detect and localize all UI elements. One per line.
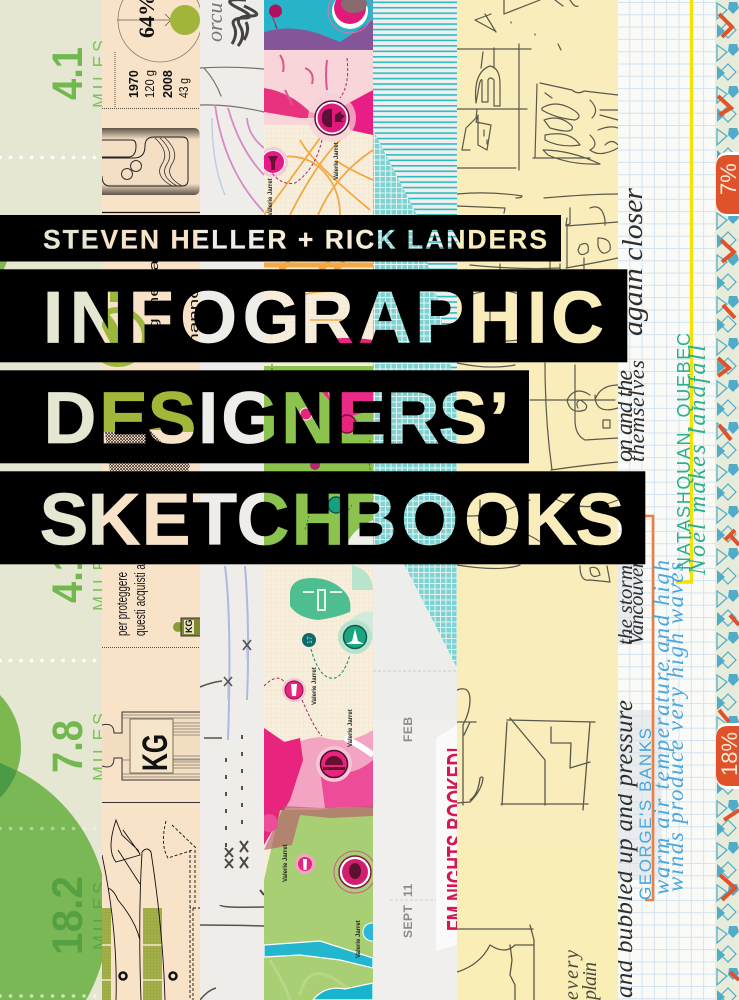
icon: large KG weight [102, 712, 201, 780]
small rotated text behind title [151, 262, 198, 342]
stat: 7.8 miles: 7.8 [44, 720, 92, 773]
green handwritten notes: NATASHQUAN, QUEBEC [674, 333, 694, 570]
green portrait and markers: 17 [307, 636, 314, 644]
panel: strip 8, geometric pattern with percent badges [716, 0, 739, 1000]
green block with halftone [104, 391, 194, 472]
labels: Valerie Jarret: Valerie Jarret [283, 844, 289, 882]
black handwritten notes: again closer [618, 188, 649, 336]
black handwritten notes: Vancouver [624, 559, 648, 645]
text: per proteggere: per proteggere [115, 572, 131, 636]
diagram: paperclip box [94, 128, 200, 195]
panel: strip 4, portrait map collage [264, 0, 373, 1000]
date labels [404, 718, 412, 938]
blue handwritten notes: GEORGE'S BANKS [636, 728, 655, 900]
author bar: Steven Heller + Rick Landers [0, 215, 561, 262]
green handwritten notes [674, 333, 711, 576]
stat: 7.8 miles [52, 714, 102, 780]
white tab with red headline [436, 726, 457, 951]
black handwritten notes [611, 188, 649, 998]
mileage circles [0, 262, 102, 1000]
stat: 4.1 miles lower [52, 544, 102, 610]
labels: Valerie Jarret: Valerie Jarret [348, 709, 354, 747]
weights 1970 and 2008 [127, 70, 191, 98]
badge: 18 percent [716, 723, 739, 789]
stat: 18.2 miles: MILES [90, 878, 110, 950]
labels: Valerie Jarret: Valerie Jarret [334, 142, 340, 180]
weights 1970 and 2008: 43 g [176, 78, 191, 98]
small rotated text behind title: l l [164, 325, 179, 355]
weights 1970 and 2008: 2008 [161, 70, 175, 98]
handwriting: plain [579, 962, 601, 1000]
teal cutout figure [264, 941, 373, 1000]
stat: 4.1 miles lower: MILES [90, 539, 110, 611]
badge: 7 percent [716, 152, 739, 216]
icon: small KG weight: KG [184, 620, 194, 633]
black handwritten notes: the storm [613, 565, 637, 645]
text: per proteggere [115, 563, 149, 636]
black handwritten notes: on and the [612, 370, 638, 462]
green handwritten notes: Noël makes landfall [685, 345, 711, 576]
pink map marker and dashed route [264, 678, 322, 736]
text: per proteggere: questi acquisti a [133, 563, 149, 636]
blue handwritten notes [636, 560, 688, 900]
orange box line [645, 516, 653, 900]
handwriting [561, 950, 601, 1000]
title bar: Designers' [0, 370, 529, 463]
date labels: SEPT 11 [401, 883, 415, 938]
pencil sketches top [457, 0, 618, 269]
small rotated text behind title: ging the sa [146, 259, 161, 355]
teal grid wedge [373, 130, 457, 680]
black handwritten notes: themselves [624, 360, 649, 462]
title bar: Sketchbooks [0, 471, 645, 564]
labels: Valerie Jarret: Valerie Jarret [356, 920, 362, 958]
icon: small KG weight [173, 618, 201, 636]
green portrait and markers [290, 565, 373, 678]
labels: Valerie Jarret: Valerie Jarret [312, 667, 318, 705]
pencil sketches lower floor plan [457, 689, 595, 1000]
panel: strip 3, pen sketch on white paper [200, 0, 265, 1000]
diagram: aircraft drawing [102, 820, 201, 1000]
upper pink map markers [258, 0, 372, 183]
title bar: Infographic [0, 269, 627, 362]
stat: 4.1 miles: MILES [90, 36, 110, 108]
panel: strip 7, graph paper notes [611, 0, 716, 1000]
black handwritten notes: and bubbled up and pressure [611, 700, 638, 998]
stat: 4.1 miles: 4.1 [44, 47, 92, 100]
panel: strip 6, yellow sketch paper [457, 0, 619, 1000]
diagram: 64 percent circle [117, 0, 202, 62]
handwritten scribbles [200, 0, 264, 212]
yellow margin line [676, 0, 692, 582]
pink map markers in title [272, 364, 371, 530]
pencil sketches behind title [457, 265, 618, 582]
green portrait lower [260, 806, 381, 1000]
tape patches [618, 560, 662, 880]
white paper cut [373, 564, 457, 718]
orange chevrons [718, 14, 739, 980]
handwriting: every [561, 950, 583, 1000]
blue handwritten notes: warm air temperature and high [649, 560, 674, 895]
green circle fragment behind title [102, 292, 146, 367]
labels: Valerie Jarret [268, 142, 362, 958]
labels: Valerie Jarret: Valerie Jarret [268, 178, 274, 216]
blue handwritten notes: winds produce very high waves [663, 562, 688, 892]
small rotated text behind title: l hanno p [186, 270, 201, 355]
white tab with red headline: FM NIGHTS BOOKED! [441, 747, 472, 931]
weights 1970 and 2008: 1970 [127, 70, 141, 98]
dotted guide lines [0, 158, 100, 996]
weights 1970 and 2008: 120 g [142, 70, 157, 98]
handwritten scribbles: orcu [202, 2, 227, 42]
stat: 4.1 miles [52, 40, 102, 106]
date labels: FEB [401, 716, 415, 742]
panel: strip 1, green mileage chart [0, 0, 110, 1000]
icon: large KG weight: KG [136, 734, 175, 771]
blue pen and cross marks [200, 566, 264, 1000]
stat: 18.2 miles [52, 878, 102, 952]
pink collage band behind title [264, 338, 373, 565]
panel: strip 2, technical diagrams [102, 0, 200, 1000]
orange illustration lines [264, 138, 373, 320]
panel: strip 5, teal stripes and paper card [373, 0, 457, 1000]
stat: 18.2 miles: 18.2 [44, 876, 92, 955]
teal portrait top [264, 0, 373, 135]
pink portrait [264, 728, 373, 845]
stat: 4.1 miles lower: 4.1 [44, 550, 92, 603]
stat: 7.8 miles: MILES [90, 709, 110, 781]
